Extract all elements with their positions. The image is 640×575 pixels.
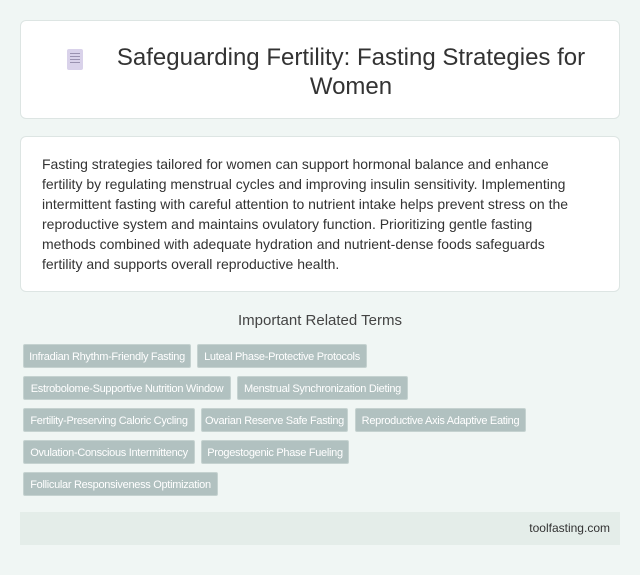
tags: Follicular Responsiveness Optimization: [30, 479, 211, 491]
tags: Infradian Rhythm-Friendly Fasting: [29, 351, 185, 363]
description text: Fasting strategies tailored for women can support hormonal balance and enhance fertility by regulating menstrual cycles and improving insulin sensitivity. Implementing intermittent fasting with careful attention to nutrient intake helps prevent stress on the reproductive system and maintains ovulatory function. Prioritizing gentle fasting methods combined with adequate hydration and nutrient-dense foods safeguards fertility and supports overall reproductive health.: [42, 156, 568, 272]
header card: [20, 20, 620, 119]
tags: Ovarian Reserve Safe Fasting: [205, 415, 344, 427]
tags: Luteal Phase-Protective Protocols: [204, 351, 360, 363]
tags: Reproductive Axis Adaptive Eating: [362, 415, 519, 427]
footer text: toolfasting.com: [529, 521, 610, 535]
tags: Fertility-Preserving Caloric Cycling: [30, 415, 188, 427]
description card: [20, 136, 620, 292]
footer: [20, 512, 620, 545]
icon: document: [67, 49, 83, 70]
tags: Menstrual Synchronization Dieting: [244, 383, 401, 395]
tags: Ovulation-Conscious Intermittency: [30, 447, 188, 459]
related terms heading: Important Related Terms: [238, 312, 402, 329]
tags: Estrobolome-Supportive Nutrition Window: [31, 383, 223, 395]
tags: Progestogenic Phase Fueling: [207, 447, 343, 459]
title: Safeguarding Fertility: Fasting Strategies for Women: [117, 44, 585, 100]
